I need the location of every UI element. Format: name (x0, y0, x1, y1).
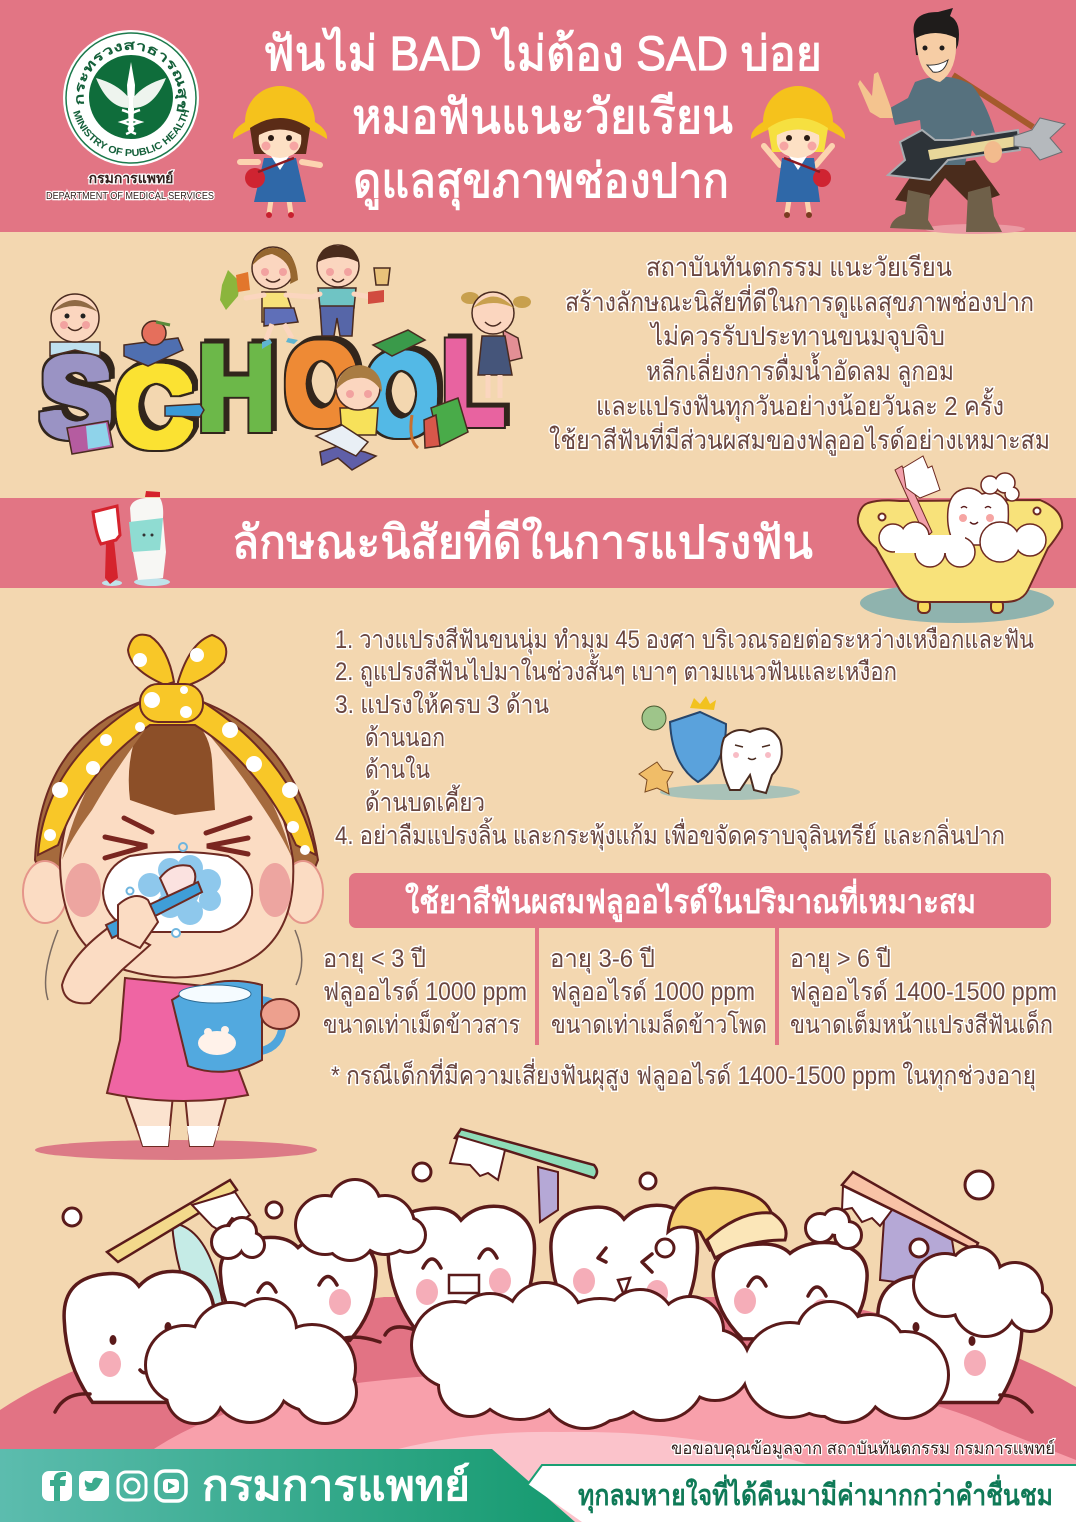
brushing steps: 4. อย่าลืมแปรงลิ้น และกระพุ้งแก้ม เพื่อขจัดคราบจุลินทรีย์ และกลิ่นปาก (335, 817, 1005, 851)
boy leaning on S (50, 294, 100, 356)
notebook and pencil (67, 404, 204, 454)
intro text: หลีกเลี่ยงการดื่มน้ำอัดลม ลูกอม (646, 352, 954, 387)
child reading a book (316, 365, 382, 470)
icon: rock guitarist (858, 8, 1065, 234)
bubbles (63, 1163, 993, 1257)
two children holding hands (220, 245, 390, 349)
column: over 6 years: ฟลูออไรด์ 1400-1500 ppm (790, 977, 1057, 1007)
column: 3 to 6 years: ขนาดเท่าเมล็ดข้าวโพด (551, 1009, 767, 1039)
credit line: ขอขอบคุณข้อมูลจาก สถาบันทันตกรรม กรมการแพทย์ (671, 1439, 1055, 1459)
legs (125, 1095, 227, 1146)
column: 3 to 6 years (550, 945, 767, 1039)
column: under 3 years (323, 945, 527, 1039)
logo: Ministry of Public Health: DEPARTMENT OF MEDICAL SERVICES (46, 191, 214, 202)
icon: schoolgirl with yellow hat (233, 86, 327, 218)
department name: กรมการแพทย์ (202, 1462, 470, 1509)
brushing steps: ด้านใน (365, 755, 430, 784)
icon: schoolboy with yellow hat (751, 86, 845, 218)
brushing steps: 2. ถูแปรงสีฟันไปมาในช่วงสั้นๆ เบาๆ ตามแนวฟันและเหงือก (335, 653, 897, 687)
intro text: ไม่ควรรับประทานขนมจุบจิบ (649, 321, 945, 352)
ears (23, 861, 323, 1000)
arm and toothbrush (62, 865, 202, 1003)
school letters: L (442, 316, 504, 450)
logo: Ministry of Public Health (46, 30, 215, 202)
girl brushing teeth (23, 635, 323, 1160)
yellow headband and bow (38, 635, 316, 855)
books and apple (124, 321, 183, 366)
pink dress (107, 978, 248, 1101)
brushing steps (335, 626, 1034, 851)
intro text: และแปรงฟันทุกวันอย่างน้อยวันละ 2 ครั้ง (596, 387, 1004, 422)
school bag (411, 398, 468, 448)
column: under 3 years: ฟลูออไรด์ 1000 ppm (323, 977, 527, 1007)
column: under 3 years: ขนาดเท่าเม็ดข้าวสาร (323, 1009, 520, 1039)
table heading (349, 873, 1051, 928)
icon: tooth in yellow foam bath (858, 456, 1062, 623)
crayon box (373, 330, 425, 356)
section heading: ลักษณะนิสัยที่ดีในการแปรงฟัน (232, 510, 813, 568)
icon: tooth with shield against germs (639, 696, 800, 800)
school letters: H (198, 321, 275, 455)
headline (263, 26, 822, 210)
icon: toothbrush and toothpaste (93, 491, 170, 586)
intro text: สร้างลักษณะนิสัยที่ดีในการดูแลสุขภาพช่องปาก (565, 284, 1034, 318)
bottom illustration: teeth and foam (0, 1129, 1076, 1522)
footer: slogan (528, 1465, 1076, 1522)
yellow hat (668, 1188, 786, 1258)
table heading: ใช้ยาสีฟันผสมฟลูออไรด์ในปริมาณที่เหมาะสม (405, 879, 976, 922)
school illustration (40, 245, 531, 470)
logo: Ministry of Public Health: กระทรวงสาธารณสุข (76, 42, 187, 112)
ground shadow (35, 1140, 317, 1160)
school letters: O (285, 321, 358, 449)
column: under 3 years: อายุ < 3 ปี (323, 945, 426, 974)
intro text: สถาบันทันตกรรม แนะวัยเรียน (646, 252, 952, 282)
school letters: C (115, 344, 193, 470)
girl with backpack (461, 292, 531, 398)
brushing steps: ด้านนอก (365, 724, 445, 752)
school letters: S (40, 334, 112, 460)
blue mug (172, 981, 299, 1072)
headline: ฟันไม่ BAD ไม่ต้อง SAD บ่อย (263, 26, 822, 81)
foam clouds (147, 1181, 1050, 1427)
footer: social media (0, 1449, 575, 1522)
logo: Ministry of Public Health: กรมการแพทย์ (89, 170, 173, 186)
fluoride table (323, 873, 1057, 1091)
column: over 6 years: อายุ > 6 ปี (790, 945, 891, 974)
gums (0, 1297, 1076, 1522)
hair fringe (129, 722, 215, 815)
face (60, 725, 293, 978)
intro text (549, 252, 1050, 456)
school letters: O (365, 331, 438, 459)
logo: Ministry of Public Health: MINISTRY OF PUBLIC HEALTH (73, 109, 190, 156)
section band: good brushing habits (0, 456, 1076, 623)
column: over 6 years (790, 945, 1057, 1039)
six smiling teeth (64, 1205, 1023, 1402)
column: 3 to 6 years: อายุ 3-6 ปี (550, 945, 655, 974)
column: 3 to 6 years: ฟลูออไรด์ 1000 ppm (551, 977, 755, 1007)
brushes and cups (107, 1129, 978, 1330)
headline: หมอฟันแนะวัยเรียน (352, 91, 733, 144)
gum lines (55, 1327, 1032, 1412)
foam mouth (103, 843, 252, 937)
school letters (40, 316, 504, 470)
cheeks and eyes (65, 818, 291, 917)
brushing steps: 3. แปรงให้ครบ 3 ด้าน (335, 690, 549, 719)
hair behind (35, 702, 318, 905)
tooth faces (99, 1248, 986, 1377)
header band (0, 0, 1076, 234)
headline: ดูแลสุขภาพช่องปาก (353, 155, 729, 210)
brushing steps: ด้านบดเคี้ยว (365, 784, 485, 817)
icons: facebook twitter instagram youtube (42, 1471, 186, 1501)
